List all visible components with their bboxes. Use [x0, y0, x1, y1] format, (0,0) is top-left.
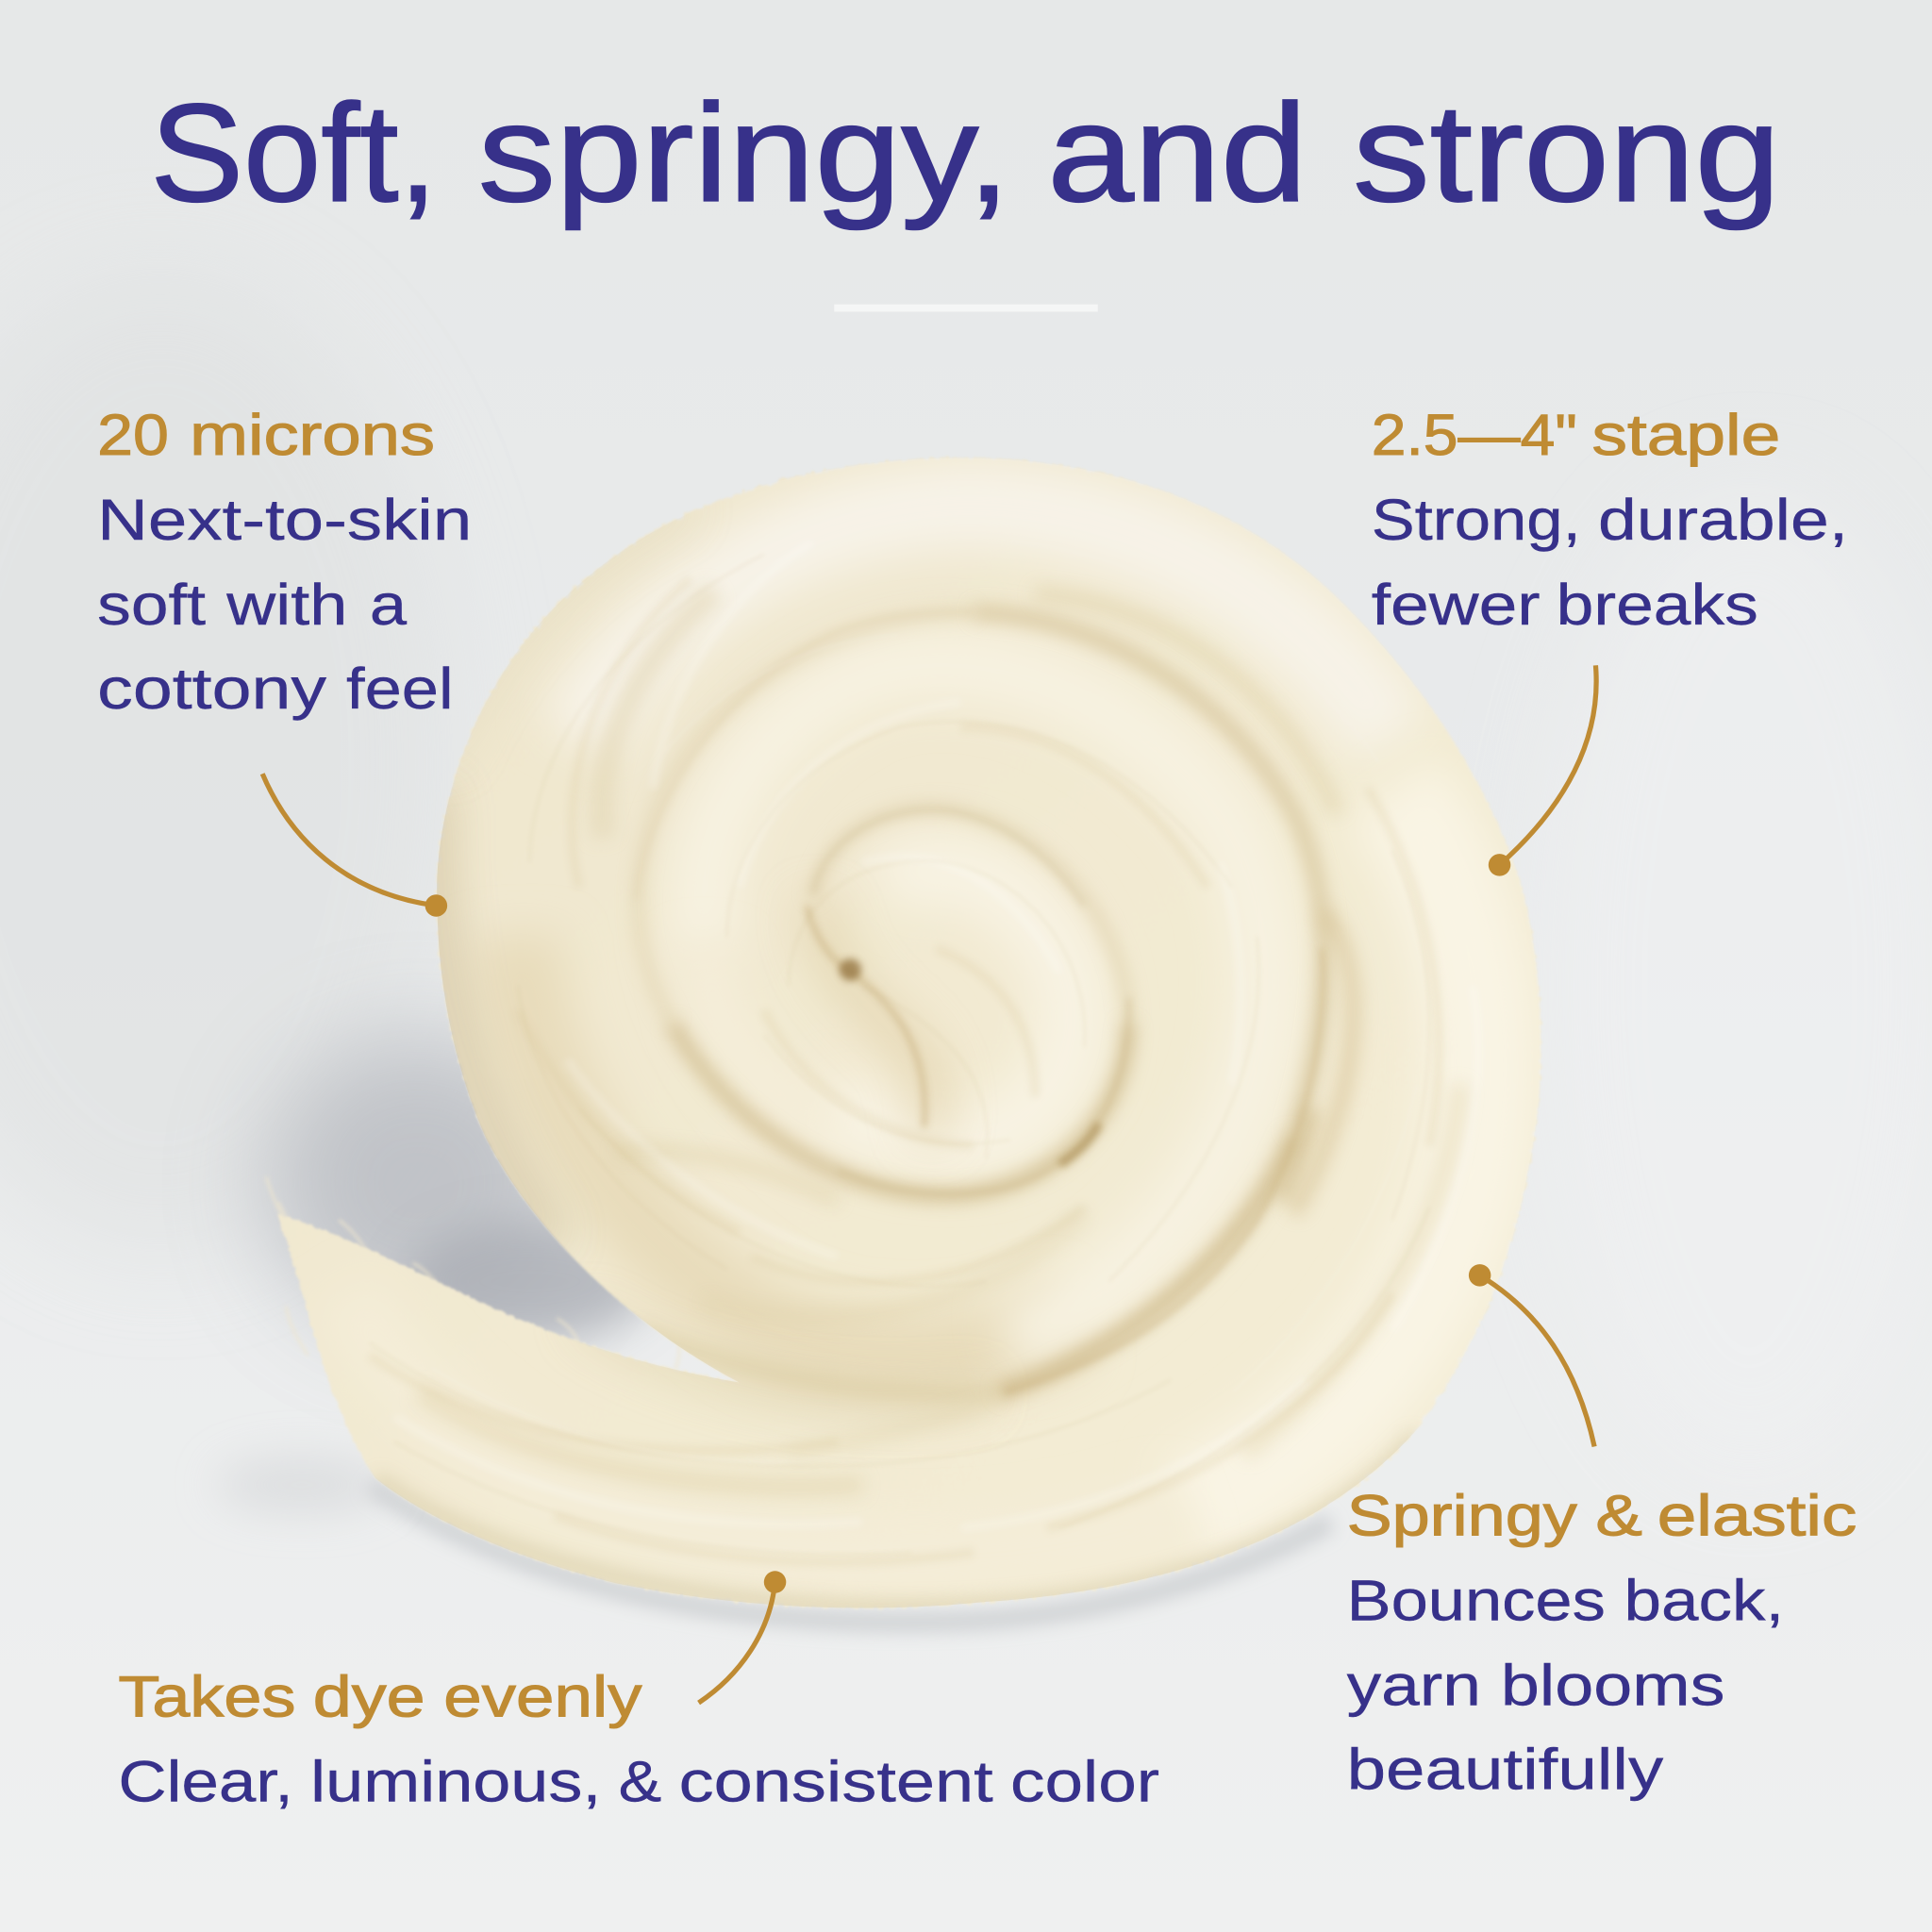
text block: takes dye evenly: Clear,: [118, 1750, 293, 1815]
title: strong: [1353, 75, 1780, 231]
text block: staple: fewer: [1372, 573, 1541, 638]
text block: 20 microns: soft: [97, 573, 206, 638]
text block: staple: 2.5—4": [1372, 403, 1577, 468]
dark pockets: [1059, 1124, 1099, 1164]
text block: 20 microns: feel: [346, 657, 454, 722]
wool body silhouette: [277, 458, 1541, 1607]
sharp coil edges: [636, 612, 1323, 1392]
text block: staple: [1372, 403, 1848, 638]
wool roving photo illustration: [266, 458, 1541, 1608]
lower-left darker area: [518, 937, 1072, 1357]
wool tail wisps: [266, 1176, 679, 1370]
shadow under wool: [216, 1035, 1331, 1623]
fine fibre strands: [370, 542, 1429, 1555]
centre swirl: [808, 906, 924, 1127]
text block: 20 microns: 20: [97, 403, 169, 468]
text block: springy and elastic: blooms: [1501, 1654, 1725, 1719]
title: [150, 75, 1780, 231]
text block: springy and elastic: &: [1595, 1483, 1642, 1548]
inner coil highlight: [825, 870, 1073, 1141]
text block: 20 microns: Next-to-skin: [97, 488, 472, 553]
text block: 20 microns: cottony: [97, 657, 326, 722]
text block: takes dye evenly: evenly: [443, 1664, 642, 1729]
text block: 20 microns: microns: [190, 403, 435, 468]
text block: 20 microns: a: [370, 573, 408, 638]
text block: 20 microns: [97, 403, 472, 722]
title divider: [834, 305, 1098, 311]
callout: staple pointer: [1489, 665, 1596, 876]
text block: staple: breaks: [1557, 573, 1758, 638]
callout: dye pointer: [699, 1571, 786, 1703]
wool shading and coils: [345, 506, 1481, 1608]
text block: springy and elastic: elastic: [1657, 1483, 1857, 1548]
text block: takes dye evenly: Takes: [118, 1664, 295, 1729]
title: springy,: [478, 75, 1010, 231]
text block: takes dye evenly: &: [619, 1750, 661, 1815]
text block: takes dye evenly: dye: [313, 1664, 425, 1729]
text block: takes dye evenly: color: [1010, 1750, 1159, 1815]
callout: springy pointer: [1469, 1264, 1594, 1446]
wide fibre streaks: [370, 542, 1478, 1562]
outer band highlights: [579, 506, 1392, 740]
title: and: [1047, 75, 1307, 231]
soft shade near swirl: [819, 899, 932, 1140]
text block: staple: Strong,: [1372, 488, 1581, 553]
callout: microns pointer: [262, 774, 447, 917]
text block: springy and elastic: Bounces: [1347, 1569, 1606, 1634]
text block: takes dye evenly: luminous,: [310, 1750, 601, 1815]
band 2 highlight: [704, 664, 1266, 1343]
text block: springy and elastic: beautifully: [1347, 1737, 1664, 1802]
text block: springy and elastic: yarn: [1347, 1654, 1481, 1719]
text block: staple: staple: [1592, 403, 1780, 468]
text block: 20 microns: with: [225, 573, 347, 638]
text block: staple: durable,: [1598, 488, 1848, 553]
coil creases, wide soft: [813, 808, 1128, 1023]
title: Soft,: [150, 75, 438, 231]
text block: springy and elastic: Springy: [1347, 1483, 1577, 1548]
text block: springy and elastic: [1347, 1483, 1857, 1802]
text block: takes dye evenly: consistent: [679, 1750, 993, 1815]
text block: springy and elastic: back,: [1624, 1569, 1784, 1634]
text block: takes dye evenly: [118, 1664, 1159, 1815]
